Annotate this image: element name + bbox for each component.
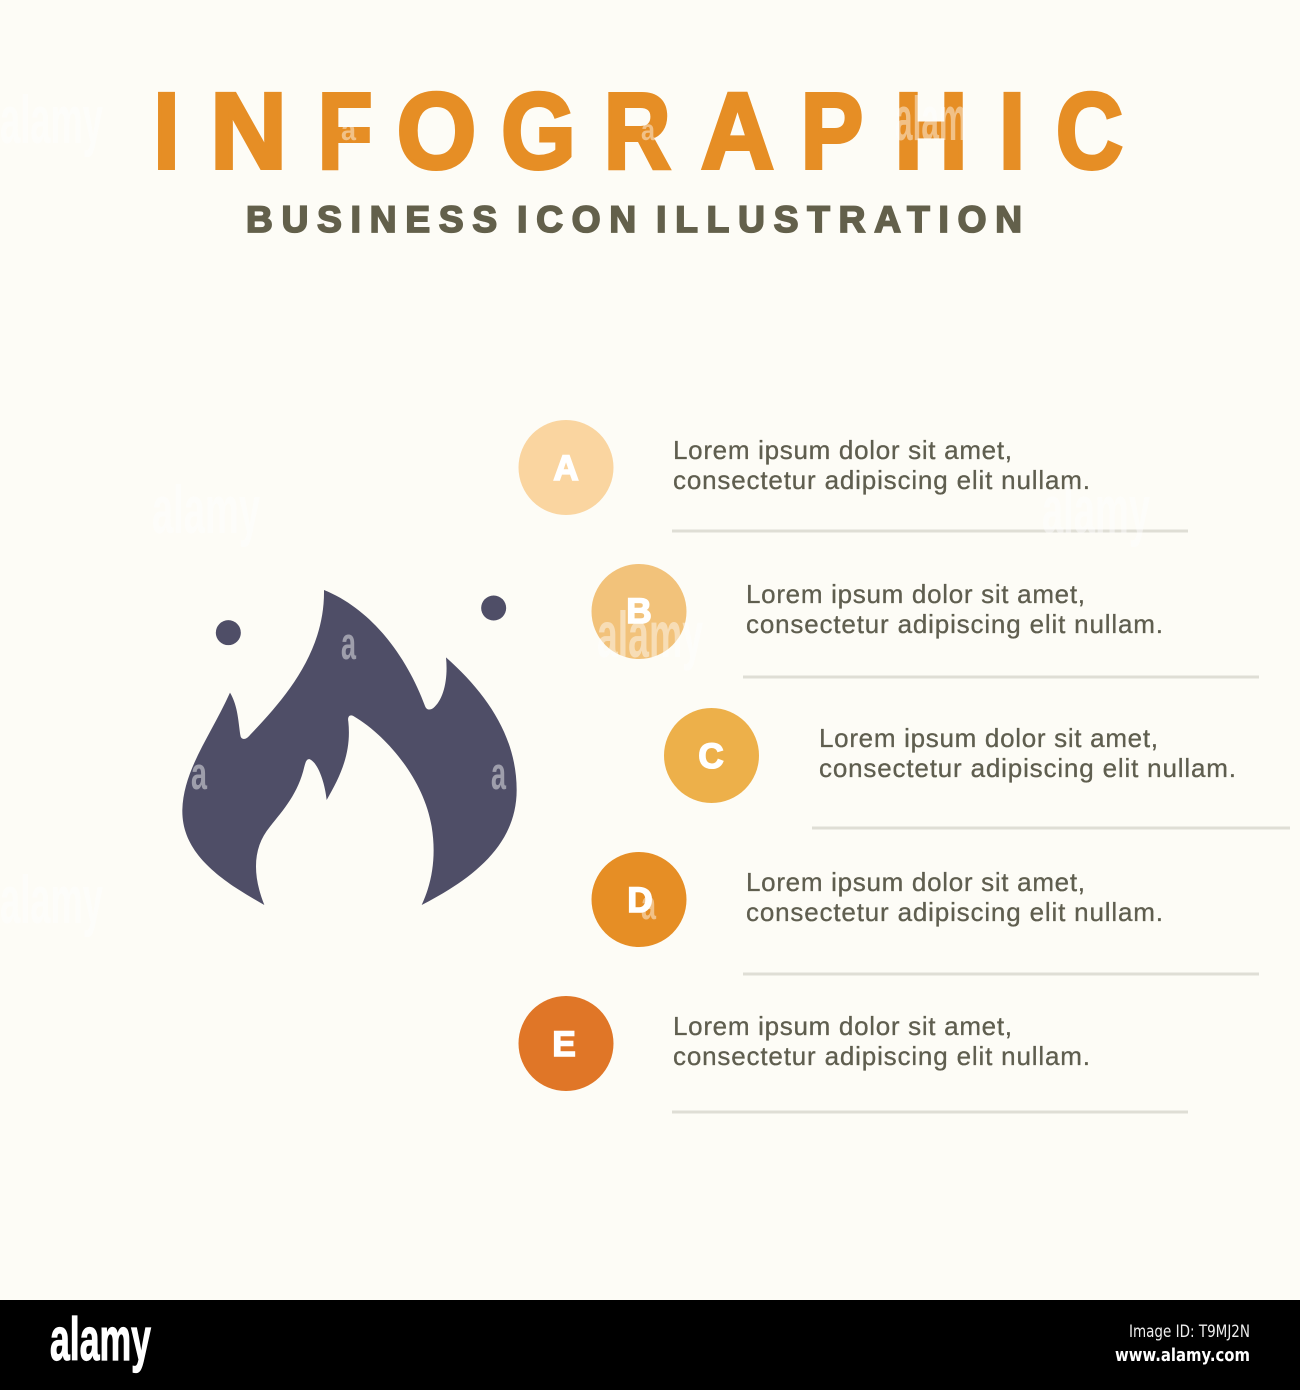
title: O xyxy=(397,70,476,191)
watermarks: a xyxy=(641,881,656,928)
option A: Lorem ipsum dolor sit amet, xyxy=(673,435,1012,465)
watermarks: alamy xyxy=(0,862,103,938)
watermarks: a xyxy=(191,748,208,799)
watermarks: alamy xyxy=(152,472,260,548)
option B: consectetur adipiscing elit nullam. xyxy=(746,609,1163,639)
watermarks: alamy xyxy=(1042,472,1150,548)
watermarks: a xyxy=(641,114,655,147)
option E: E xyxy=(552,1025,576,1064)
option D xyxy=(592,852,1259,976)
watermarks: alamy xyxy=(597,598,703,671)
option C: Lorem ipsum dolor sit amet, xyxy=(819,723,1158,753)
option C: C xyxy=(698,737,724,776)
option A: consectetur adipiscing elit nullam. xyxy=(673,465,1090,495)
title: I xyxy=(999,70,1025,191)
option C: consectetur adipiscing elit nullam. xyxy=(819,753,1236,783)
option D: Lorem ipsum dolor sit amet, xyxy=(746,867,1085,897)
title: A xyxy=(701,70,774,191)
option B xyxy=(592,564,1259,678)
title: F xyxy=(318,70,372,191)
icon: flame with two sparks xyxy=(182,590,517,905)
watermarks: alamy xyxy=(0,82,103,158)
title: N xyxy=(210,70,287,191)
option E: Lorem ipsum dolor sit amet, xyxy=(673,1011,1012,1041)
option B: B xyxy=(626,592,652,631)
option A xyxy=(518,420,1188,532)
watermarks xyxy=(0,82,1150,938)
option D: D xyxy=(627,881,653,920)
option A: A xyxy=(553,449,579,488)
title xyxy=(154,70,1123,191)
title: C xyxy=(1056,70,1123,191)
title: I xyxy=(154,70,180,191)
title: G xyxy=(501,70,576,191)
watermarks: alam xyxy=(895,85,967,154)
footer bar xyxy=(0,1300,1300,1390)
option B: Lorem ipsum dolor sit amet, xyxy=(746,579,1085,609)
footer bar: Image ID: T9MJ2N xyxy=(1129,1322,1250,1342)
footer bar: www.alamy.com xyxy=(1115,1345,1250,1366)
option C xyxy=(664,708,1290,830)
footer logo: alamy xyxy=(50,1306,151,1373)
option E: consectetur adipiscing elit nullam. xyxy=(673,1041,1090,1071)
watermarks: a xyxy=(491,748,507,799)
title: P xyxy=(801,70,863,191)
title: R xyxy=(604,70,671,191)
option E xyxy=(518,996,1188,1114)
title: H xyxy=(894,70,968,191)
watermarks: a xyxy=(341,114,356,147)
subtitle: BUSINESS ICON ILLUSTRATION xyxy=(246,199,1022,240)
option D: consectetur adipiscing elit nullam. xyxy=(746,897,1163,927)
watermarks: a xyxy=(341,618,357,669)
